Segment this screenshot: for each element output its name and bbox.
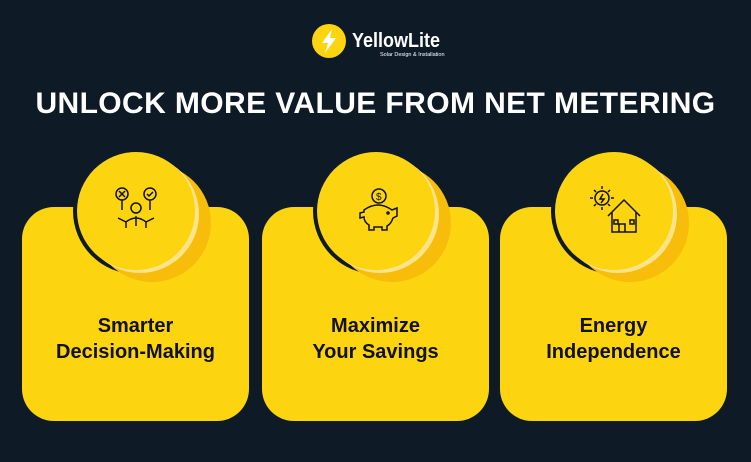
logo: Solar Design & Installation — [380, 52, 445, 58]
icon: piggy bank: $ — [376, 192, 382, 203]
logo — [312, 24, 445, 58]
panel: energy independence: Energy — [580, 315, 647, 337]
panel: maximize savings: Maximize — [331, 315, 420, 337]
panel: maximize savings — [262, 152, 489, 421]
panel: smarter decision-making: Decision-Making — [56, 341, 215, 363]
panel: smarter decision-making — [22, 152, 249, 421]
icon: piggy bank — [359, 188, 398, 231]
panel: energy independence: Independence — [546, 341, 681, 363]
panel: energy independence — [500, 152, 727, 421]
title: UNLOCK MORE VALUE FROM NET METERING — [35, 87, 716, 120]
icon: solar house — [590, 186, 640, 233]
panel: smarter decision-making: Smarter — [98, 315, 173, 337]
panel: maximize savings: Your Savings — [312, 341, 439, 363]
icon: decision person — [115, 187, 157, 228]
